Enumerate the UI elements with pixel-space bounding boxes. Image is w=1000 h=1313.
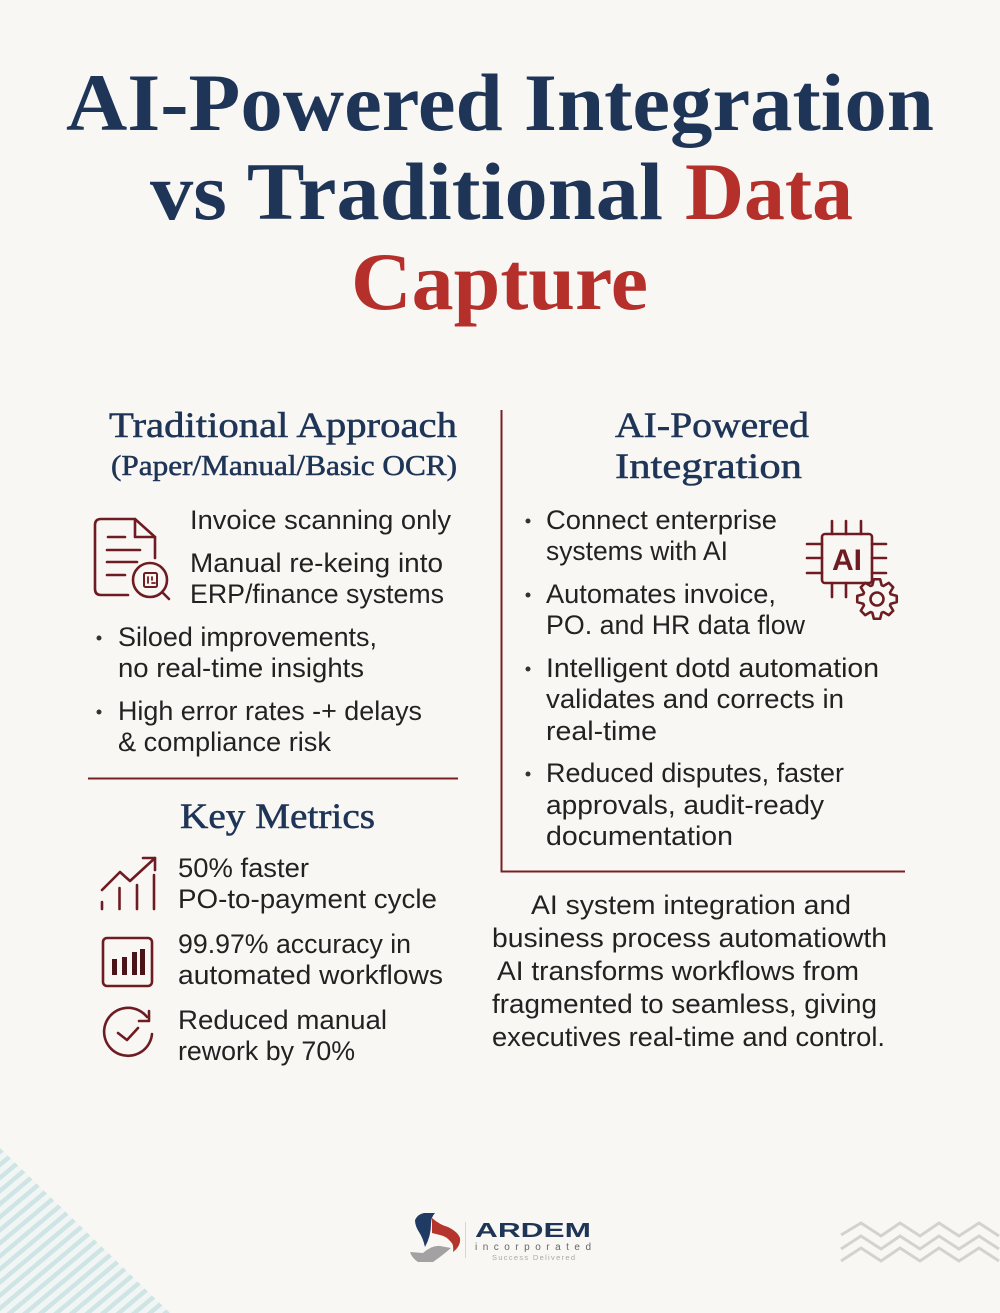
traditional list items: High error rates -+ delays — [118, 696, 422, 726]
traditional list items: & compliance risk — [118, 727, 331, 757]
panel: AI-powered integration — [526, 405, 897, 851]
AI list items: Intelligent dotd automation — [546, 653, 879, 683]
heading: AI-powered integration: AI-Powered — [615, 405, 809, 445]
AI list items: documentation — [546, 821, 733, 851]
logo wordmark: ARDEM — [475, 1220, 591, 1242]
AI list items: Connect enterprise — [546, 505, 777, 535]
summary paragraph: executives real-time and control. — [492, 1022, 885, 1052]
icon: circular check — [104, 1008, 152, 1056]
traditional list items: Manual re-keing into — [190, 548, 443, 578]
AI list items: Automates invoice, — [546, 579, 776, 609]
logo wordmark: Success Delivered — [492, 1253, 575, 1262]
AI list items: validates and corrects in — [546, 684, 844, 714]
AI list items: approvals, audit-ready — [546, 790, 825, 820]
AI list items: systems with AI — [546, 536, 728, 566]
AI list items: Reduced disputes, faster — [546, 758, 844, 788]
panel: traditional approach — [95, 405, 457, 757]
traditional list items: Invoice scanning only — [190, 505, 451, 535]
metric: reduced rework: Reduced manual — [178, 1005, 387, 1035]
heading: traditional approach — [109, 405, 457, 482]
AI list items — [526, 505, 879, 851]
heading: key metrics: Key Metrics — [180, 796, 375, 836]
traditional list items: Siloed improvements, — [118, 622, 377, 652]
title: Data — [685, 146, 853, 237]
summary paragraph — [492, 890, 887, 1052]
title — [66, 57, 934, 327]
heading: traditional approach: (Paper/Manual/Basic OCR) — [111, 450, 457, 482]
heading: AI-powered integration: Integration — [615, 446, 802, 486]
title: vs Traditional — [150, 146, 663, 237]
traditional list items: ERP/finance systems — [190, 579, 444, 609]
metric: faster cycle: PO-to-payment cycle — [178, 884, 437, 914]
summary paragraph: fragmented to seamless, giving — [492, 989, 877, 1019]
metric: reduced rework — [178, 1005, 387, 1066]
AI list items: PO. and HR data flow — [546, 610, 805, 640]
heading: traditional approach: Traditional Approach — [109, 405, 457, 445]
summary paragraph: business process automatiowth — [492, 923, 887, 953]
panel: key metrics — [102, 796, 443, 1066]
logo: ARDEM — [410, 1213, 591, 1262]
summary paragraph: AI system integration and — [531, 890, 851, 920]
summary paragraph: AI transforms workflows from — [497, 956, 859, 986]
metric: accuracy: automated workflows — [178, 960, 443, 990]
icon: document with magnifier — [95, 519, 169, 599]
icon: AI chip with gear: AI — [832, 544, 862, 577]
traditional list items — [96, 505, 451, 757]
title: Capture — [351, 236, 648, 327]
AI list items: real-time — [546, 716, 657, 746]
metric: faster cycle — [178, 853, 437, 914]
logo mark — [410, 1213, 460, 1262]
icon: bar chart box — [103, 938, 152, 986]
title: AI-Powered Integration — [66, 57, 934, 148]
metric: reduced rework: rework by 70% — [178, 1036, 355, 1066]
metric: faster cycle: 50% faster — [178, 853, 309, 883]
logo wordmark — [475, 1220, 591, 1262]
heading: AI-powered integration — [615, 405, 809, 486]
metric: accuracy — [178, 929, 443, 990]
traditional list items: no real-time insights — [118, 653, 364, 683]
logo wordmark: incorporated — [475, 1242, 591, 1253]
icon: growth chart — [102, 858, 155, 909]
metric: accuracy: 99.97% accuracy in — [178, 929, 411, 959]
icon: AI chip with gear — [807, 521, 897, 619]
